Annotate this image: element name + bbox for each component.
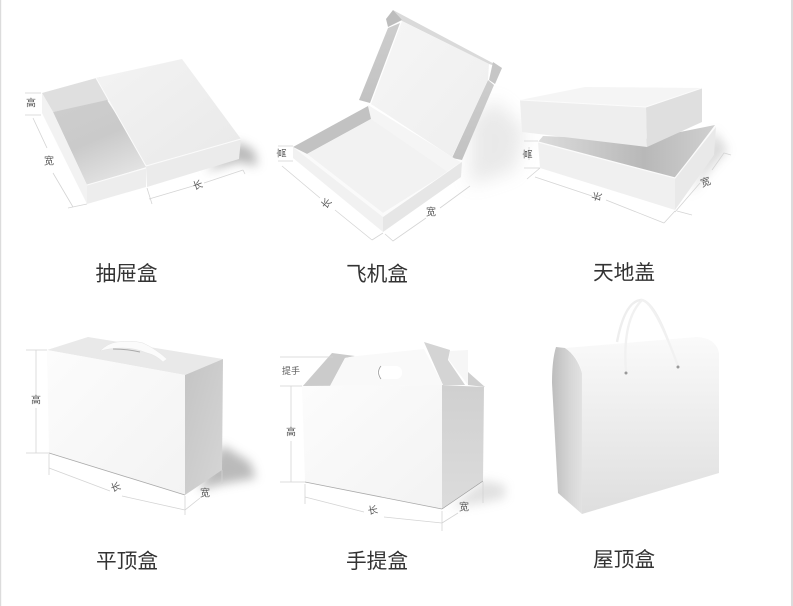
dimension: height: 高 bbox=[522, 149, 534, 159]
right edge strip bbox=[791, 0, 793, 606]
back rope handle bbox=[617, 300, 670, 346]
right flap white panel bbox=[449, 350, 468, 385]
panel: airplane box bbox=[276, 10, 525, 241]
box body bbox=[302, 385, 484, 509]
handle bbox=[100, 341, 167, 362]
caption: lid and base box: 天地盖 bbox=[593, 262, 655, 284]
front panel bbox=[565, 337, 719, 514]
caption: airplane box: 飞机盒 bbox=[346, 263, 408, 286]
dimension: height: 高 bbox=[276, 148, 288, 158]
dimension: length: 长 bbox=[109, 480, 123, 495]
dimension: length: 长 bbox=[319, 196, 334, 211]
dimension: length: 长 bbox=[367, 504, 379, 517]
panel: lid and base box bbox=[520, 87, 731, 223]
dimension lines bbox=[25, 93, 245, 208]
dimension: height: 高 bbox=[286, 426, 296, 438]
front rope handle bbox=[624, 300, 680, 374]
left flap bbox=[302, 353, 355, 387]
dimension: width: 宽 bbox=[44, 154, 54, 168]
lid bbox=[520, 87, 702, 147]
gable front panel with handle hole bbox=[330, 349, 443, 386]
base bbox=[538, 125, 716, 210]
right flap gray bbox=[424, 342, 465, 385]
panel: drawer box bbox=[25, 59, 258, 208]
dimension: width: 宽 bbox=[426, 206, 436, 218]
side panel bbox=[552, 347, 582, 514]
dimension: width: 宽 bbox=[459, 500, 469, 514]
panel: roof box bag bbox=[552, 300, 719, 514]
gray side gable bbox=[468, 372, 485, 387]
left edge strip bbox=[0, 0, 1, 606]
sleeve bbox=[96, 59, 241, 187]
caption: handle box: 手提盒 bbox=[346, 550, 408, 573]
dimension: width: 宽 bbox=[699, 174, 713, 190]
caption: roof box bag: 屋顶盒 bbox=[593, 548, 655, 572]
box body bbox=[47, 337, 223, 495]
caption: flat top box: 平顶盒 bbox=[96, 550, 158, 573]
dimension: height: 高 bbox=[31, 394, 41, 406]
dimension: width: 宽 bbox=[200, 486, 210, 500]
dimension lines bbox=[524, 141, 731, 223]
dimension lines bbox=[26, 350, 222, 515]
base bbox=[293, 105, 462, 232]
caption: drawer box: 抽屉盒 bbox=[95, 262, 158, 286]
panel: handle box bbox=[280, 342, 505, 531]
panel: flat top box bbox=[26, 337, 256, 515]
dimension: length: 长 bbox=[590, 190, 605, 204]
dimension: height: 高 bbox=[26, 96, 36, 110]
dimension: handle: 提手 bbox=[282, 365, 300, 376]
lid bbox=[359, 10, 502, 160]
drawer tray bbox=[42, 77, 150, 204]
dimension lines bbox=[280, 357, 483, 531]
dimension: length: 长 bbox=[191, 178, 205, 193]
dimension lines bbox=[278, 146, 470, 241]
